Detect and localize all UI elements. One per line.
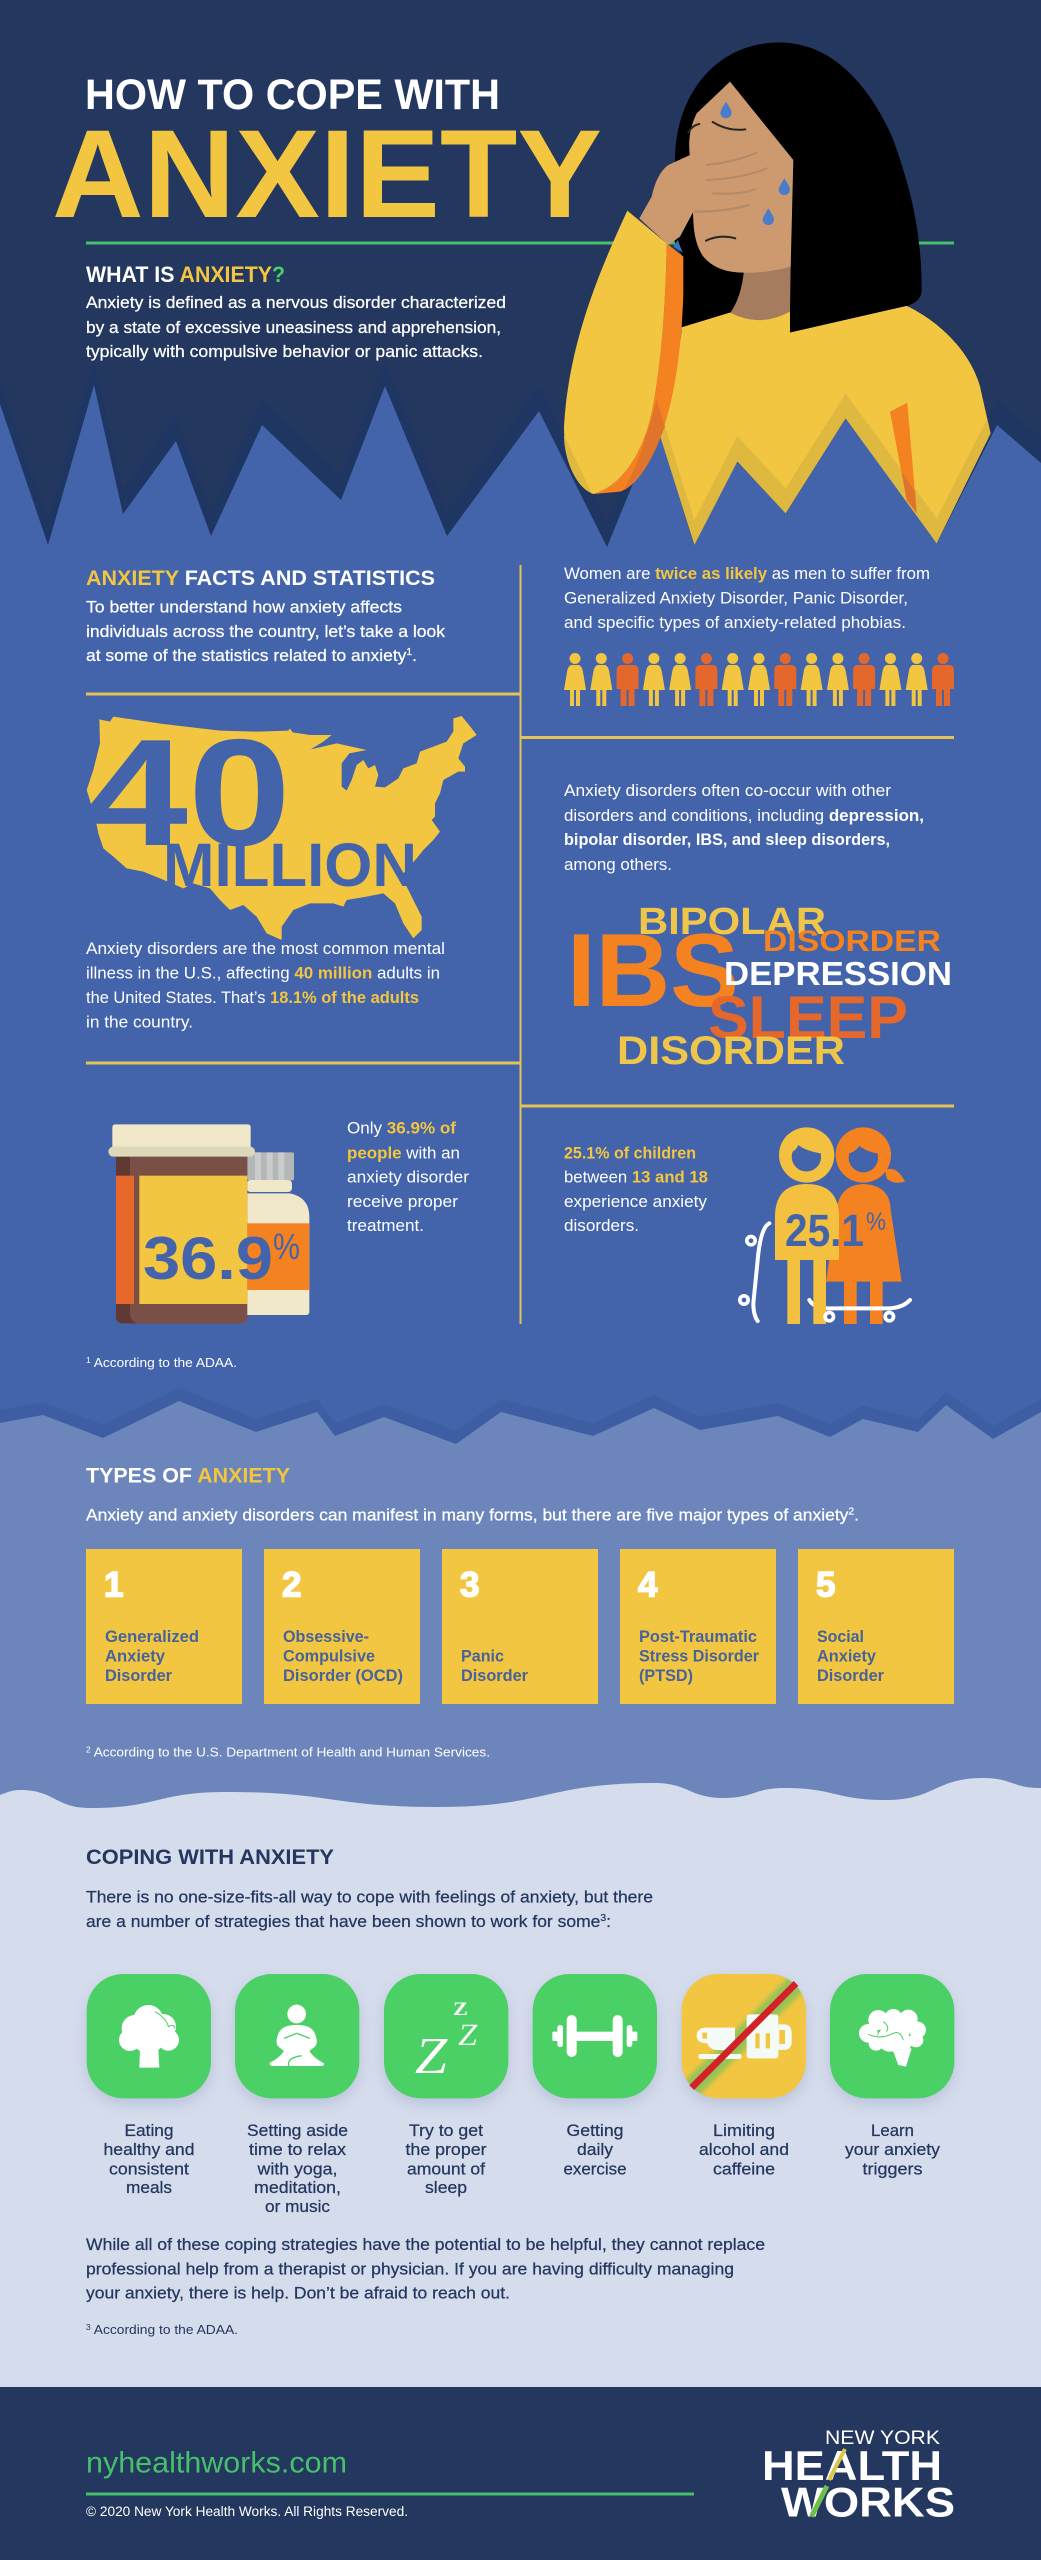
card 4: Stress Disorder: [639, 1647, 759, 1666]
sweater hem shadow: [657, 306, 991, 545]
coping intro: 3: [600, 1913, 607, 1924]
types intro: .: [854, 1506, 859, 1525]
coping heading: COPING WITH ANXIETY: [86, 1846, 334, 1869]
coping label 4: daily: [577, 2140, 614, 2159]
what is anxiety text: Anxiety is defined as a nervous disorder characterized: [86, 293, 506, 312]
card 5: Disorder: [817, 1666, 884, 1685]
word cloud: SLEEP: [708, 984, 908, 1051]
fact: women twice as likely: and specific types of anxiety-related phobias.: [564, 613, 906, 632]
card 1: Anxiety: [105, 1647, 166, 1666]
sweater fold: [890, 403, 917, 513]
fact: 40 million adults: illness in the U.S., affecting 40 million adults in: [86, 964, 440, 983]
sleeve cuff orange: [593, 243, 683, 494]
closing paragraph: [86, 2235, 765, 2303]
percent sign: %: [273, 1226, 300, 1267]
fact: children: disorders.: [564, 1216, 639, 1235]
facts intro: 1: [406, 647, 413, 658]
coping label 6: Learn: [871, 2121, 914, 2140]
coping intro: :: [606, 1912, 611, 1931]
word cloud: BIPOLAR: [638, 901, 826, 943]
header background: [0, 0, 1041, 640]
card 5: Anxiety: [817, 1647, 877, 1666]
card 4: Post-Traumatic: [639, 1627, 757, 1646]
icon shadows: [87, 1980, 954, 2104]
types intro: Anxiety and anxiety disorders can manifest in many forms, but there are five major types of anxiety: [86, 1506, 828, 1525]
neck: [730, 263, 791, 325]
coping label 4: Getting: [566, 2121, 624, 2140]
sleeve: [564, 211, 667, 494]
tear drops: [720, 102, 790, 225]
icon: no coffee or beer: [682, 1974, 806, 2098]
coping label 1: Eating: [124, 2121, 174, 2140]
fact: treatment: treatment.: [347, 1216, 424, 1235]
fact: women twice as likely: Generalized Anxiety Disorder, Panic Disorder,: [564, 588, 908, 608]
fact: treatment: Only 36.9% of: [347, 1119, 456, 1138]
finger lines: [695, 153, 767, 212]
girl: [826, 1127, 905, 1324]
card 2: Obsessive-: [283, 1627, 369, 1646]
facts intro: individuals across the country, let’s take a look: [86, 622, 446, 641]
facts grid lines: [86, 565, 954, 1324]
fact: children: 25.1% of children: [564, 1144, 696, 1163]
coping label 3: Try to get: [409, 2121, 483, 2140]
percent sign: %: [866, 1208, 886, 1236]
logo: WORKS: [781, 2479, 955, 2526]
facts intro: To better understand how anxiety affects: [86, 598, 402, 616]
closing paragraph: While all of these coping strategies have the potential to be helpful, they cannot replace: [86, 2235, 765, 2254]
types intro: 2: [848, 1507, 855, 1518]
closing paragraph: professional help from a therapist or physician. If you are having difficulty managing: [86, 2259, 734, 2278]
title line two: ANXIETY: [52, 105, 602, 244]
card 1: 1: [104, 1566, 123, 1605]
fact: co-occurring disorders: [564, 781, 924, 874]
fact: 40 million adults: the United States. That’s 18.1% of the adults: [86, 988, 419, 1007]
word cloud: DEPRESSION: [724, 955, 952, 992]
footnote 1: 1: [86, 1356, 91, 1365]
fact: treatment: anxiety disorder: [347, 1168, 469, 1186]
coping label 4: exercise: [564, 2159, 626, 2178]
footnote 3: 3: [86, 2323, 91, 2332]
fact: children: between 13 and 18: [564, 1168, 708, 1186]
coping label 2: [247, 2121, 348, 2216]
card 2: 2: [282, 1566, 301, 1605]
illustration: pill bottles with 36.9%: [108, 1124, 309, 1323]
footnote 2: According to the U.S. Department of Health and Human Services.: [91, 1745, 490, 1760]
us map shape: [87, 716, 477, 940]
footer website: nyhealthworks.com: [86, 2447, 347, 2480]
footer background: [0, 2387, 1041, 2560]
logo: [762, 2428, 955, 2526]
card 3: 3: [460, 1566, 479, 1605]
coping label 4: [564, 2121, 626, 2178]
footnote 3: According to the ADAA.: [91, 2322, 238, 2337]
fact: treatment: receive proper: [347, 1192, 458, 1211]
footnote 1: According to the ADAA.: [91, 1355, 237, 1370]
illustration: anxious woman: [564, 43, 991, 545]
coping label 2: with yoga,: [256, 2159, 338, 2178]
sweater: [657, 306, 987, 520]
horizontal skateboard: [809, 1300, 910, 1323]
card 1: [86, 1549, 242, 1704]
sleep letters: [411, 1999, 481, 2085]
facts intro: [86, 598, 446, 665]
types section background: [0, 1401, 1041, 1830]
card 4: [620, 1549, 776, 1704]
logo: HEALTH: [762, 2442, 942, 2489]
coping label 5: [699, 2121, 789, 2178]
what is anxiety text: typically with compulsive behavior or panic attacks.: [86, 342, 483, 361]
coping label 3: amount of: [407, 2159, 485, 2178]
pictogram: women and men: [564, 653, 954, 706]
card 1: Disorder: [105, 1666, 172, 1685]
card 2: Disorder (OCD): [283, 1666, 403, 1685]
coping label 3: the proper: [406, 2140, 487, 2159]
word cloud: IBS: [567, 913, 739, 1029]
types heading: TYPES OF ANXIETY: [86, 1465, 290, 1488]
coping intro: There is no one-size-fits-all way to cope with feelings of anxiety, but there: [86, 1888, 653, 1907]
closing paragraph: your anxiety, there is help. Don’t be afraid to reach out.: [86, 2284, 510, 2303]
coping label 2: meditation,: [254, 2178, 341, 2197]
hand: [639, 150, 757, 245]
sleep letters: Z: [453, 1999, 468, 2020]
coping label 2: Setting aside: [247, 2121, 348, 2140]
coping label 2: time to relax: [249, 2140, 347, 2159]
coping label 6: triggers: [862, 2159, 922, 2178]
icon: sleep: [384, 1974, 508, 2098]
card 2: [264, 1549, 420, 1704]
title: [52, 71, 602, 244]
card 4: (PTSD): [639, 1666, 693, 1685]
card 1: Generalized: [105, 1627, 199, 1646]
what is anxiety text: by a state of excessive uneasiness and apprehension,: [86, 318, 501, 337]
vertical skateboard: [738, 1223, 769, 1321]
fact: 40 million adults: in the country.: [86, 1012, 193, 1032]
36.9: 36.9: [143, 1225, 273, 1292]
copyright: © 2020 New York Health Works. All Rights Reserved.: [86, 2504, 408, 2519]
coping label 5: alcohol and: [699, 2140, 789, 2159]
25.1: 25.1: [785, 1205, 864, 1256]
fact: children: experience anxiety: [564, 1192, 707, 1211]
fact: treatment: [347, 1119, 469, 1235]
sleep letters: Z: [456, 2017, 481, 2052]
icon: brain: [830, 1974, 954, 2098]
card 2: Compulsive: [283, 1647, 375, 1666]
coping label 1: healthy and: [104, 2140, 194, 2159]
fact: treatment: people with an: [347, 1144, 460, 1163]
what is anxiety heading: WHAT IS ANXIETY?: [86, 262, 285, 287]
facts intro: at some of the statistics related to anxiety: [86, 646, 398, 665]
coping intro: [86, 1888, 653, 1931]
icons: food, yoga, sleep: [87, 1974, 508, 2098]
facts section background: [0, 385, 1041, 1440]
million: MILLION: [163, 831, 417, 899]
facial expression: [688, 122, 745, 241]
coping section background: [0, 1778, 1041, 2390]
fact: 40 million adults: Anxiety disorders are the most common mental: [86, 939, 445, 958]
coping label 5: Limiting: [713, 2121, 775, 2140]
word cloud: [567, 901, 952, 1073]
card 3: Disorder: [461, 1666, 528, 1685]
facts intro: .: [412, 646, 417, 665]
icon: meditation: [235, 1974, 359, 2098]
coping label 3: [406, 2121, 487, 2197]
boy: [775, 1127, 839, 1324]
coping intro: are a number of strategies that have been shown to work for some: [86, 1912, 586, 1931]
map: united states with 40 million: [85, 708, 477, 940]
card 5: 5: [816, 1566, 835, 1605]
what is anxiety text: [86, 293, 506, 361]
coping label 1: consistent: [109, 2159, 189, 2178]
coping label 1: meals: [126, 2178, 172, 2197]
card 5: Social: [817, 1627, 864, 1646]
card 3: Panic: [461, 1647, 504, 1666]
fact: women twice as likely: [564, 564, 930, 632]
coping label 5: caffeine: [713, 2159, 775, 2178]
card 3: [442, 1549, 598, 1704]
40: 40: [85, 708, 291, 878]
fact: co-occurring disorders: Anxiety disorders often co-occur with other: [564, 781, 891, 800]
footnote 2: 2: [86, 1746, 91, 1755]
zigzag band, types section: [0, 1388, 1041, 1460]
icons: exercise, no alcohol, brain: [533, 1974, 954, 2098]
small bottle: [247, 1152, 294, 1180]
title line one: HOW TO COPE WITH: [85, 71, 500, 119]
sleep letters: Z: [411, 2027, 454, 2085]
fact: co-occurring disorders: disorders and conditions, including depression,: [564, 806, 924, 825]
fact: co-occurring disorders: bipolar disorder, IBS, and sleep disorders,: [564, 830, 890, 849]
card 5: [798, 1549, 954, 1704]
card 4: 4: [638, 1566, 658, 1605]
icon: dumbbell: [533, 1974, 657, 2098]
fact: women twice as likely: Women are twice as likely as men to suffer from: [564, 564, 930, 583]
coping label 2: or music: [265, 2197, 331, 2216]
face: [689, 82, 793, 273]
zigzag shadow band: [0, 360, 1041, 600]
facts heading: ANXIETY FACTS AND STATISTICS: [86, 567, 435, 590]
word cloud: DISORDER: [763, 925, 941, 958]
coping label 1: [104, 2121, 194, 2197]
big jar: [116, 1157, 247, 1323]
fact: co-occurring disorders: among others.: [564, 855, 672, 874]
word cloud: DISORDER: [617, 1029, 845, 1073]
hair: [675, 43, 922, 333]
logo: NEW YORK: [825, 2428, 940, 2449]
green divider: [86, 242, 954, 244]
illustration: children with 25.1%: [738, 1127, 910, 1324]
icon: broccoli: [87, 1974, 211, 2098]
coping label 6: your anxiety: [845, 2140, 941, 2159]
coping label 6: [845, 2121, 941, 2178]
footer rule: [86, 2492, 694, 2496]
fact: 40 million adults: [86, 939, 445, 1032]
fact: children: [564, 1144, 708, 1235]
coping label 3: sleep: [425, 2178, 467, 2197]
